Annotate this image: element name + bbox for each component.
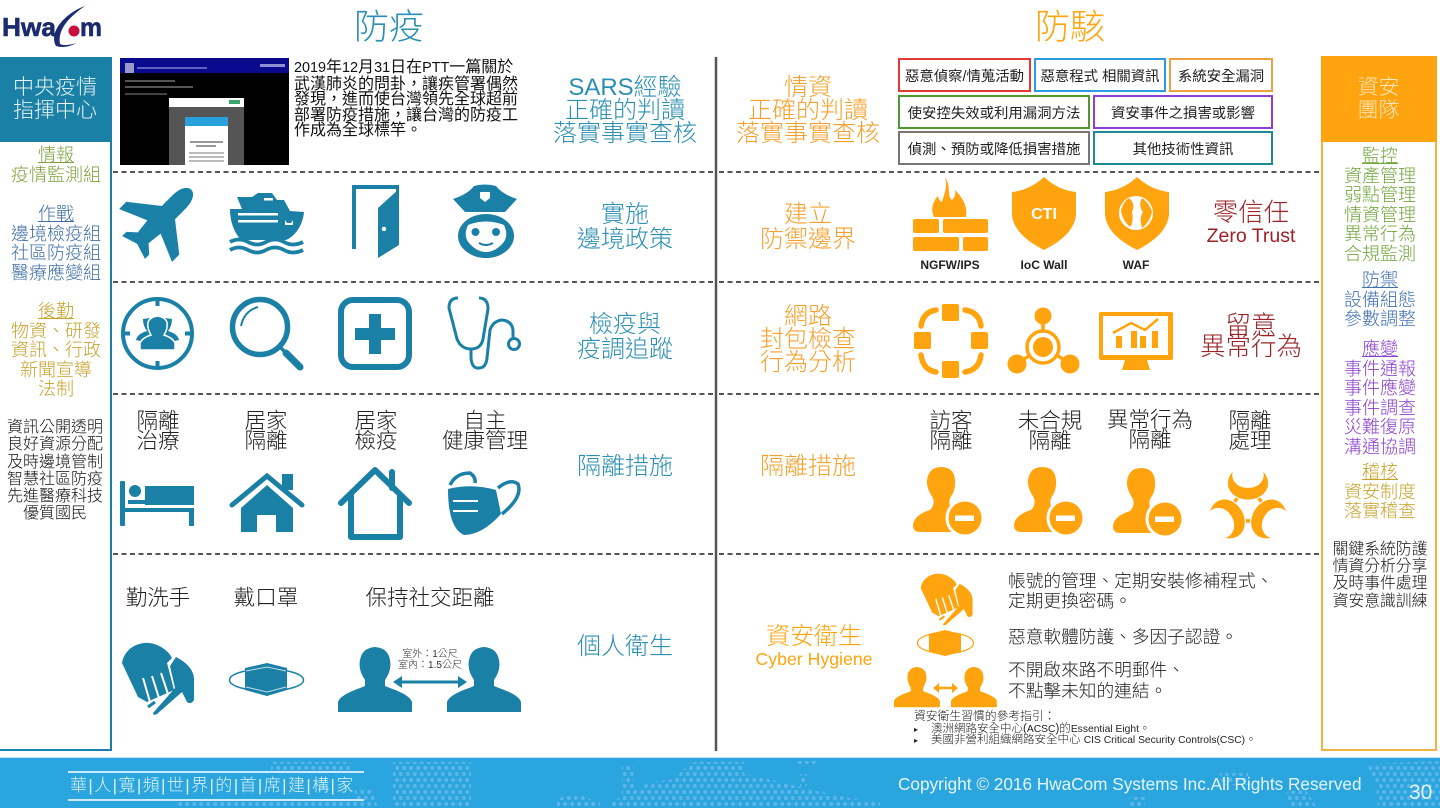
- label: 自主健康管理: 健康管理: [442, 429, 528, 453]
- group: 後勤: 法制: [38, 379, 74, 399]
- label: 勤洗手: 勤洗手: [126, 586, 190, 610]
- heading: 建立防禦邊界: 建立: [784, 201, 832, 228]
- group: 後勤: 資訊、行政: [11, 340, 101, 360]
- panel header: 指揮中心: [13, 98, 97, 122]
- label: 居家檢疫: 居家: [354, 409, 398, 433]
- icon: medical cross: [341, 300, 409, 367]
- icon: door: [352, 185, 399, 258]
- icon: hand washing: [122, 643, 194, 715]
- icon: user minus 3: [1113, 468, 1184, 538]
- group: 應變: 溝通協調: [1344, 437, 1416, 457]
- group: 後勤: 新聞宣導: [20, 360, 92, 380]
- group: 監控: 異常行為: [1344, 224, 1416, 244]
- label: 異常行為隔離: [1107, 408, 1193, 452]
- text: malware protection: 惡意軟體防護、多因子認證。: [1008, 627, 1238, 647]
- slogan: [68, 771, 364, 801]
- text: references: ▸ 美國非營利組織網路安全中心 CIS Critical Security Controls(CSC)。: [914, 734, 1257, 746]
- icon: stethoscope: [449, 298, 520, 368]
- icon: plane: [107, 163, 218, 274]
- panel header: 資安: [1358, 76, 1400, 99]
- label: 訪客隔離: [929, 409, 972, 453]
- group: 監控: 監控: [1362, 146, 1398, 166]
- group: 情報: 情報: [38, 145, 74, 165]
- logo: HwaCom: Hwa: [2, 12, 57, 42]
- text: key factors: 先進醫療科技: [7, 488, 103, 505]
- heading: 資安衛生: [756, 623, 872, 669]
- text: PTT narrative: 武漢肺炎的問卦，讓疾管署偶然: [294, 76, 518, 92]
- text: 留意異常行為: 異常行為: [1200, 333, 1302, 361]
- icon: house: [232, 474, 302, 532]
- text: email caution: 不點擊未知的連結。: [1008, 681, 1167, 701]
- group: 應變: 事件應變: [1344, 378, 1416, 398]
- group: 作戰: 邊境檢疫組: [11, 224, 101, 244]
- text: 留意異常行為: 留意: [1225, 312, 1276, 340]
- label: 未合規隔離: [1018, 409, 1082, 453]
- text: key items: 資安意識訓練: [1333, 593, 1427, 610]
- icon: biohazard: [1205, 469, 1291, 544]
- label: 居家檢疫: 檢疫: [354, 429, 398, 453]
- label: 隔離治療: 治療: [136, 429, 180, 453]
- heading: 資安衛生: 資安衛生: [766, 623, 862, 650]
- text: key items: [1333, 540, 1427, 610]
- group: 後勤: 物資、研發: [11, 321, 101, 341]
- group: 稽核: 落實稽查: [1344, 501, 1416, 521]
- icon: face mask: [448, 473, 519, 535]
- panel header: 團隊: [1358, 99, 1400, 122]
- box: green: 使安控失效或利用漏洞方法: [908, 106, 1080, 122]
- box: red: [898, 58, 1031, 92]
- text: PTT narrative: [294, 58, 518, 139]
- group: 應變: 災難復原: [1344, 417, 1416, 437]
- text: references: ▸ 澳洲網路安全中心(ACSC)的Essential Eight。: [914, 722, 1150, 734]
- text: 零信任 Zero Trust: Zero Trust: [1207, 225, 1295, 247]
- heading: 檢疫與疫調追蹤: [577, 311, 673, 363]
- heading: 網路封包檢查行為分析: 行為分析: [760, 349, 856, 376]
- heading: SARS經驗: 落實事實查核: [553, 120, 697, 147]
- panel: 資安團隊: [1321, 56, 1437, 751]
- heading: 實施邊境政策: 實施: [601, 201, 649, 228]
- box: purple: [1093, 95, 1273, 129]
- label: 保持社交距離: 保持社交距離: [365, 586, 494, 610]
- icon: social distance people: [338, 647, 521, 712]
- label: 未合規隔離: 隔離: [1028, 429, 1072, 453]
- heading: 建立防禦邊界: [760, 201, 856, 253]
- group: 監控: 資產管理: [1344, 166, 1416, 186]
- label: 異常行為隔離: 異常行為: [1107, 408, 1193, 432]
- heading: 建立防禦邊界: 防禦邊界: [760, 226, 856, 253]
- logo: HwaCom: [2, 6, 102, 47]
- icon: user minus 2: [1014, 467, 1086, 538]
- box: blue: 惡意程式 相關資訊: [1040, 68, 1160, 84]
- slogan: 華|人|寬|頻|世|界|的|首|席|建|構|家: [70, 776, 355, 795]
- heading: 檢疫與疫調追蹤: 疫調追蹤: [577, 336, 673, 363]
- label: IoC Wall: IoC Wall: [1021, 258, 1067, 272]
- label: 居家檢疫: [354, 409, 398, 453]
- text: key items: 關鍵系統防護: [1333, 541, 1427, 558]
- panel header: [1320, 56, 1436, 142]
- heading: 情資: 落實事實查核: [736, 120, 880, 147]
- box: red: 惡意偵察/情蒐活動: [905, 68, 1024, 84]
- panel header: [0, 57, 110, 142]
- box: teal: [1093, 131, 1273, 165]
- box: gray: 偵測、預防或降低損害措施: [908, 142, 1080, 158]
- heading: SARS經驗: SARS經驗: [568, 74, 682, 101]
- group: 稽核: [1344, 462, 1416, 521]
- heading: 個人衛生: 個人衛生: [577, 633, 673, 660]
- group: 應變: 事件調查: [1344, 398, 1416, 418]
- text: 留意異常行為: [1200, 312, 1302, 361]
- icon: ship: [230, 193, 304, 252]
- panel: 中央疫情指揮中心: [0, 57, 112, 751]
- group: 情報: [11, 145, 101, 185]
- group: 應變: 應變: [1362, 339, 1398, 359]
- threat intel categories: [898, 58, 1273, 165]
- text: key factors: 優質國民: [23, 505, 87, 522]
- icon: flat mask: [230, 663, 304, 696]
- icon: user minus 1: [913, 467, 984, 538]
- label: 自主健康管理: [442, 409, 528, 453]
- heading: 實施邊境政策: 邊境政策: [577, 226, 673, 253]
- text: PTT narrative: 作成為全球標竿。: [294, 122, 422, 139]
- text: account hygiene: [1008, 571, 1273, 611]
- group: 作戰: [11, 204, 101, 283]
- text: email caution: 不開啟來路不明郵件、: [1008, 660, 1185, 680]
- group: 監控: 情資管理: [1344, 205, 1416, 225]
- label: 未合規隔離: 未合規: [1018, 409, 1082, 433]
- label: 訪客隔離: 隔離: [929, 429, 972, 453]
- text: key factors: [7, 418, 103, 522]
- text: PTT narrative: 2019年12月31日在PTT一篇關於: [294, 59, 513, 76]
- box: blue: [1034, 58, 1166, 92]
- title: 防疫: 防疫: [354, 8, 424, 47]
- text: references: [914, 709, 1257, 746]
- icon: hub nodes: [1008, 308, 1080, 374]
- label: 戴口罩: 戴口罩: [234, 586, 298, 610]
- heading: 資安衛生: Cyber Hygiene: [756, 649, 872, 669]
- text: account hygiene: 定期更換密碼。: [1008, 591, 1132, 611]
- group: 防禦: 參數調整: [1344, 309, 1416, 329]
- group: 稽核: 稽核: [1362, 462, 1398, 482]
- label: 隔離治療: [136, 409, 180, 453]
- heading: 實施邊境政策: [577, 201, 673, 253]
- group: 監控: 弱點管理: [1344, 185, 1416, 205]
- text: account hygiene: 帳號的管理、定期安裝修補程式、: [1008, 571, 1273, 591]
- label: 隔離處理: [1228, 409, 1272, 453]
- label: 居家隔離: [244, 409, 288, 453]
- text: distance note: 室外：1公尺: [402, 649, 458, 660]
- icon: police officer: [453, 184, 517, 258]
- logo: HwaCom: m: [80, 12, 102, 42]
- group: 後勤: [11, 301, 101, 399]
- heading: 檢疫與疫調追蹤: 檢疫與: [589, 311, 661, 338]
- copyright: Copyright © 2016 HwaCom Systems Inc.All Rights Reserved: [898, 774, 1362, 794]
- text: key items: 情資分析分享: [1333, 558, 1427, 575]
- heading: SARS經驗: [553, 74, 697, 147]
- icon: orange people with arrow: [894, 667, 997, 707]
- group: 稽核: 資安制度: [1344, 482, 1416, 502]
- box: orange: 系統安全漏洞: [1178, 68, 1264, 84]
- group: 防禦: 設備組態: [1344, 290, 1416, 310]
- text: key factors: 良好資源分配: [7, 436, 103, 453]
- label: 隔離處理: 隔離: [1228, 409, 1272, 433]
- group: 防禦: [1344, 270, 1416, 329]
- text: key factors: 及時邊境管制: [7, 454, 103, 471]
- title: 防駭: 防駭: [1035, 8, 1105, 47]
- box: green: [898, 95, 1090, 129]
- icon: CTI shield: CTI: [1031, 206, 1057, 223]
- heading: 網路封包檢查行為分析: 網路: [784, 303, 832, 330]
- heading: 網路封包檢查行為分析: [760, 303, 856, 376]
- text: PTT narrative: 部署防疫措施，讓台灣的防疫工: [294, 106, 518, 124]
- heading: 隔離措施: 隔離措施: [577, 453, 673, 480]
- icon: monitor chart: [1099, 312, 1173, 370]
- label: 隔離治療: 隔離: [136, 409, 180, 433]
- icon: firewall: [913, 177, 988, 251]
- text: key items: 及時事件處理: [1333, 575, 1427, 592]
- heading: 情資: 正確的判讀: [748, 97, 868, 124]
- icon: bed: [120, 481, 194, 526]
- label: 居家隔離: 居家: [244, 409, 288, 433]
- label: 異常行為隔離: 隔離: [1128, 428, 1172, 452]
- page number: 30: [1409, 781, 1432, 804]
- icon: network ring: [914, 304, 988, 378]
- text: 零信任 Zero Trust: [1207, 199, 1296, 247]
- group: 防禦: 防禦: [1362, 270, 1398, 290]
- box: teal: 其他技術性資訊: [1133, 142, 1233, 158]
- group: 後勤: 後勤: [38, 301, 74, 321]
- label: NGFW/IPS: NGFW/IPS: [920, 258, 980, 272]
- group: 作戰: 社區防疫組: [11, 243, 101, 263]
- heading: 情資: [736, 74, 880, 147]
- text: key factors: 資訊公開透明: [7, 419, 103, 436]
- heading: 隔離措施 (資安): 隔離措施: [760, 453, 856, 480]
- footer band: [0, 758, 1440, 808]
- text: references: 資安衛生習慣的參考指引：: [914, 709, 1056, 723]
- label: 自主健康管理: 自主: [463, 409, 506, 433]
- label: 居家隔離: 隔離: [244, 429, 288, 453]
- text: distance note: 室內：1.5公尺: [398, 660, 462, 670]
- panel header: 中央疫情: [13, 76, 97, 99]
- icon: target people: [122, 298, 193, 369]
- group: 作戰: 作戰: [38, 204, 74, 224]
- group: 情報: 疫情監測組: [11, 165, 101, 185]
- icon: CTI shield: [1012, 177, 1076, 250]
- icon: orange mask: [918, 630, 974, 656]
- group: 監控: [1344, 146, 1416, 264]
- vertical divider: [715, 57, 717, 751]
- label: 訪客隔離: 訪客: [929, 409, 972, 433]
- text: key factors: 智慧社區防疫: [7, 471, 103, 488]
- group: 作戰: 醫療應變組: [11, 263, 101, 283]
- heading: 情資: 情資: [784, 74, 832, 101]
- box: gray: [898, 131, 1090, 165]
- group: 應變: [1344, 339, 1416, 457]
- group: 監控: 合規監測: [1344, 244, 1416, 264]
- icon: house outline: [341, 470, 409, 537]
- heading: 網路封包檢查行為分析: 封包檢查: [760, 326, 856, 353]
- text: 零信任 Zero Trust: 零信任: [1213, 199, 1289, 227]
- heading: SARS經驗: 正確的判讀: [565, 97, 685, 124]
- group: 應變: 事件通報: [1344, 359, 1416, 379]
- icon: orange hand washing: [921, 574, 973, 625]
- icon: WAF shield: [1105, 177, 1169, 250]
- label: WAF: WAF: [1123, 258, 1149, 272]
- box: orange: [1169, 58, 1273, 92]
- text: distance note: [398, 648, 462, 670]
- text: email caution: [1008, 660, 1185, 701]
- text: PTT narrative: 發現，進而使台灣領先全球超前: [294, 91, 518, 108]
- screenshot: PTT post: [120, 58, 289, 165]
- icon: magnifier: [232, 300, 300, 367]
- label: 隔離處理: 處理: [1228, 429, 1272, 453]
- box: purple: 資安事件之損害或影響: [1111, 106, 1255, 122]
